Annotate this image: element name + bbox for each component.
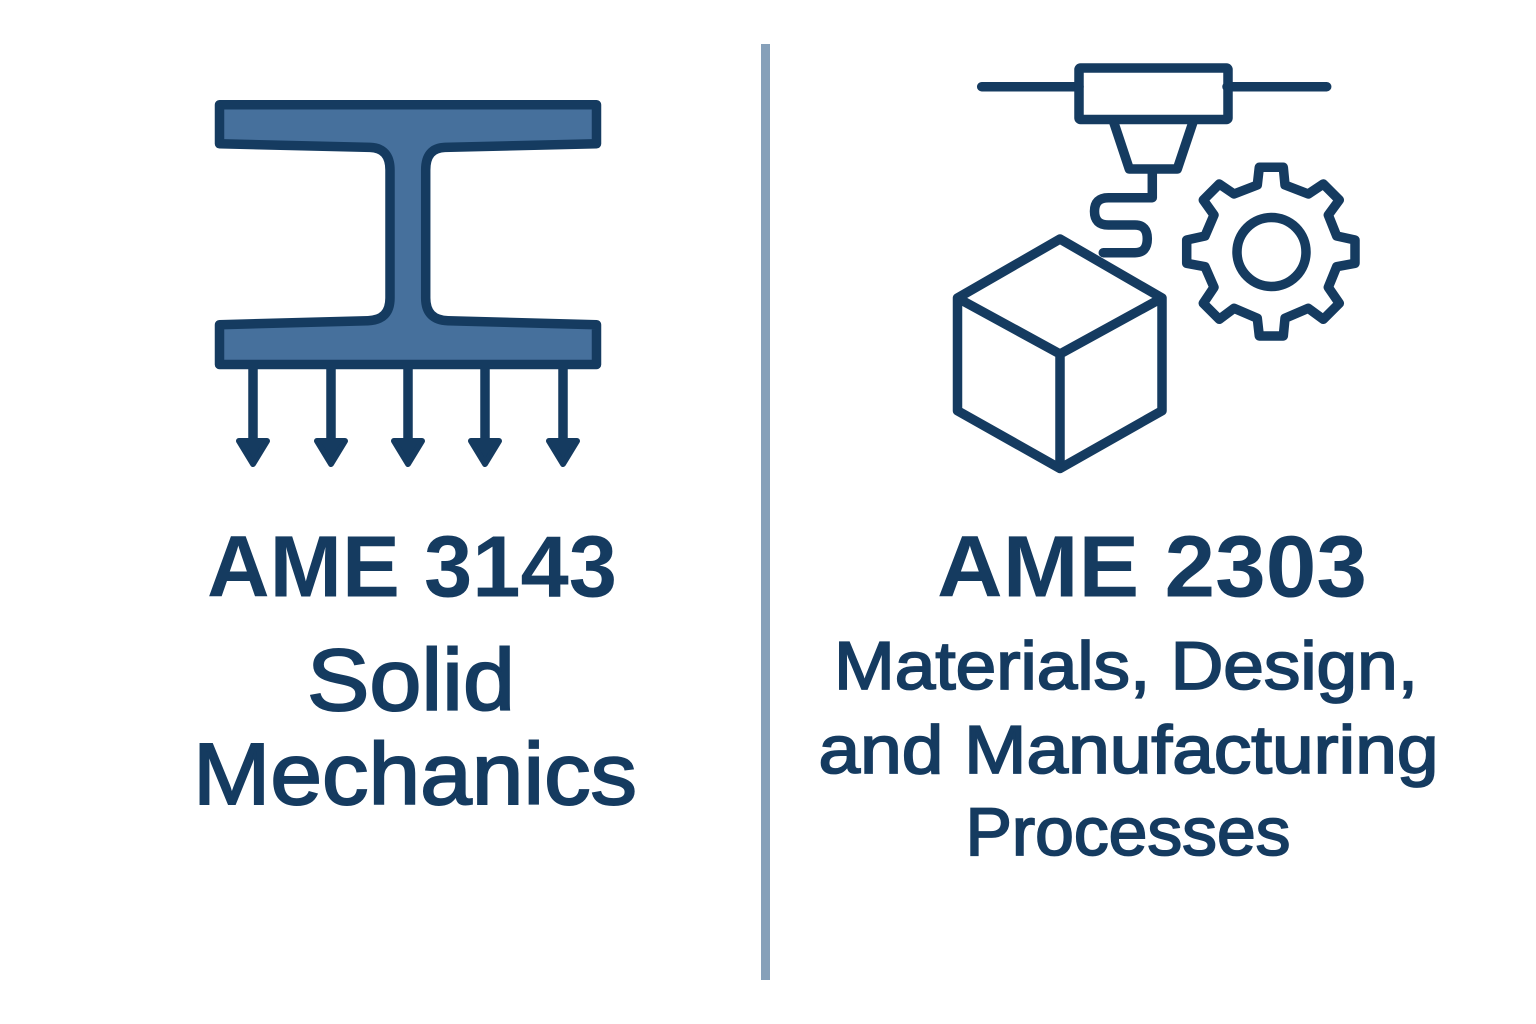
- divider between courses: [761, 44, 770, 980]
- subheading: Materials, Design, and Manufacturing Processes: Processes: [966, 794, 1290, 870]
- subheading: Solid Mechanics: Mechanics: [193, 726, 637, 823]
- icon: I-beam with distributed load: [220, 105, 596, 464]
- I-beam: [220, 105, 596, 364]
- load arrows: [239, 368, 577, 464]
- heading: AME 3143: AME 3143: [207, 518, 617, 616]
- printer rail: [982, 82, 1327, 91]
- cube: [958, 239, 1162, 468]
- print head: [1079, 68, 1228, 120]
- subheading: Solid Mechanics: Solid: [307, 632, 515, 729]
- subheading: Materials, Design, and Manufacturing Processes: Materials, Design,: [834, 628, 1418, 704]
- gear: [1187, 167, 1355, 336]
- extruded filament: [1094, 173, 1152, 253]
- subheading: Solid Mechanics: [193, 632, 637, 823]
- subheading: Materials, Design, and Manufacturing Processes: [818, 628, 1438, 870]
- heading: AME 2303: AME 2303: [937, 518, 1367, 616]
- nozzle: [1114, 123, 1193, 169]
- icon: 3D printer, cube and gear: [958, 68, 1355, 468]
- subheading: Materials, Design, and Manufacturing Processes: and Manufacturing: [818, 712, 1438, 788]
